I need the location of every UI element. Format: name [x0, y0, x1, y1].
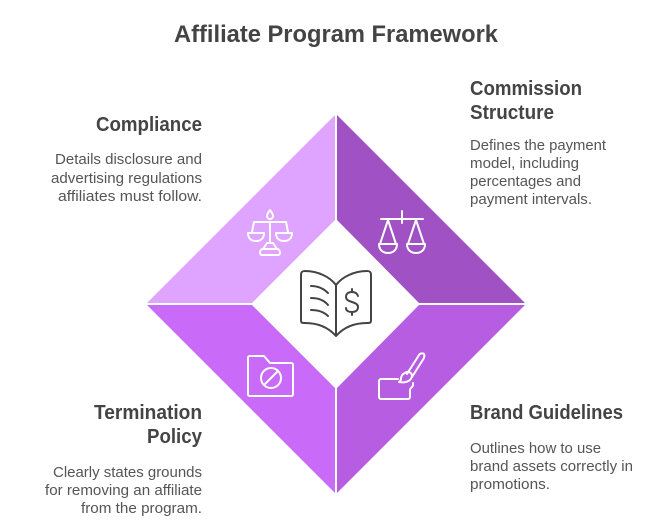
title: Affiliate Program Framework	[174, 21, 498, 48]
icon: paintbrush and box	[379, 353, 424, 399]
panel: termination policy segment	[147, 305, 335, 493]
text block: compliance	[51, 114, 202, 205]
text block: termination policy: from the program.	[81, 501, 202, 517]
text block: commission structure	[470, 78, 606, 208]
text block: termination policy	[45, 402, 203, 517]
panel: compliance segment	[147, 115, 335, 303]
text block: commission structure: Commission	[470, 78, 582, 100]
text block: brand guidelines: Outlines how to use	[470, 441, 601, 457]
icon: folder with prohibition sign	[248, 356, 293, 396]
text block: commission structure: payment intervals.	[470, 192, 592, 208]
icon: open book with dollar sign	[301, 271, 371, 336]
panel: brand guidelines segment	[337, 305, 525, 493]
text block: brand guidelines: Brand Guidelines	[470, 402, 623, 424]
text block: brand guidelines: promotions.	[470, 477, 550, 493]
text block: termination policy: Clearly states grounds	[53, 465, 202, 481]
panel: commission structure segment	[337, 115, 525, 303]
text block: commission structure: percentages and	[470, 174, 581, 190]
text block: compliance: advertising regulations	[51, 171, 202, 187]
text block: compliance: affiliates must follow.	[58, 189, 202, 205]
text block: commission structure: model, including	[470, 156, 579, 172]
text block: brand guidelines	[470, 402, 633, 493]
icon: compliance scales	[248, 210, 292, 255]
text block: commission structure: Defines the payment	[470, 138, 606, 154]
icon: commission scales	[379, 211, 425, 253]
text block: termination policy: Policy	[147, 426, 203, 448]
text block: termination policy: Termination	[94, 402, 202, 424]
text block: compliance: Compliance	[96, 114, 202, 136]
text block: compliance: Details disclosure and	[55, 152, 202, 168]
text block: commission structure: Structure	[470, 102, 554, 124]
text block: brand guidelines: brand assets correctly in	[470, 459, 633, 475]
text block: termination policy: for removing an affiliate	[45, 483, 202, 499]
